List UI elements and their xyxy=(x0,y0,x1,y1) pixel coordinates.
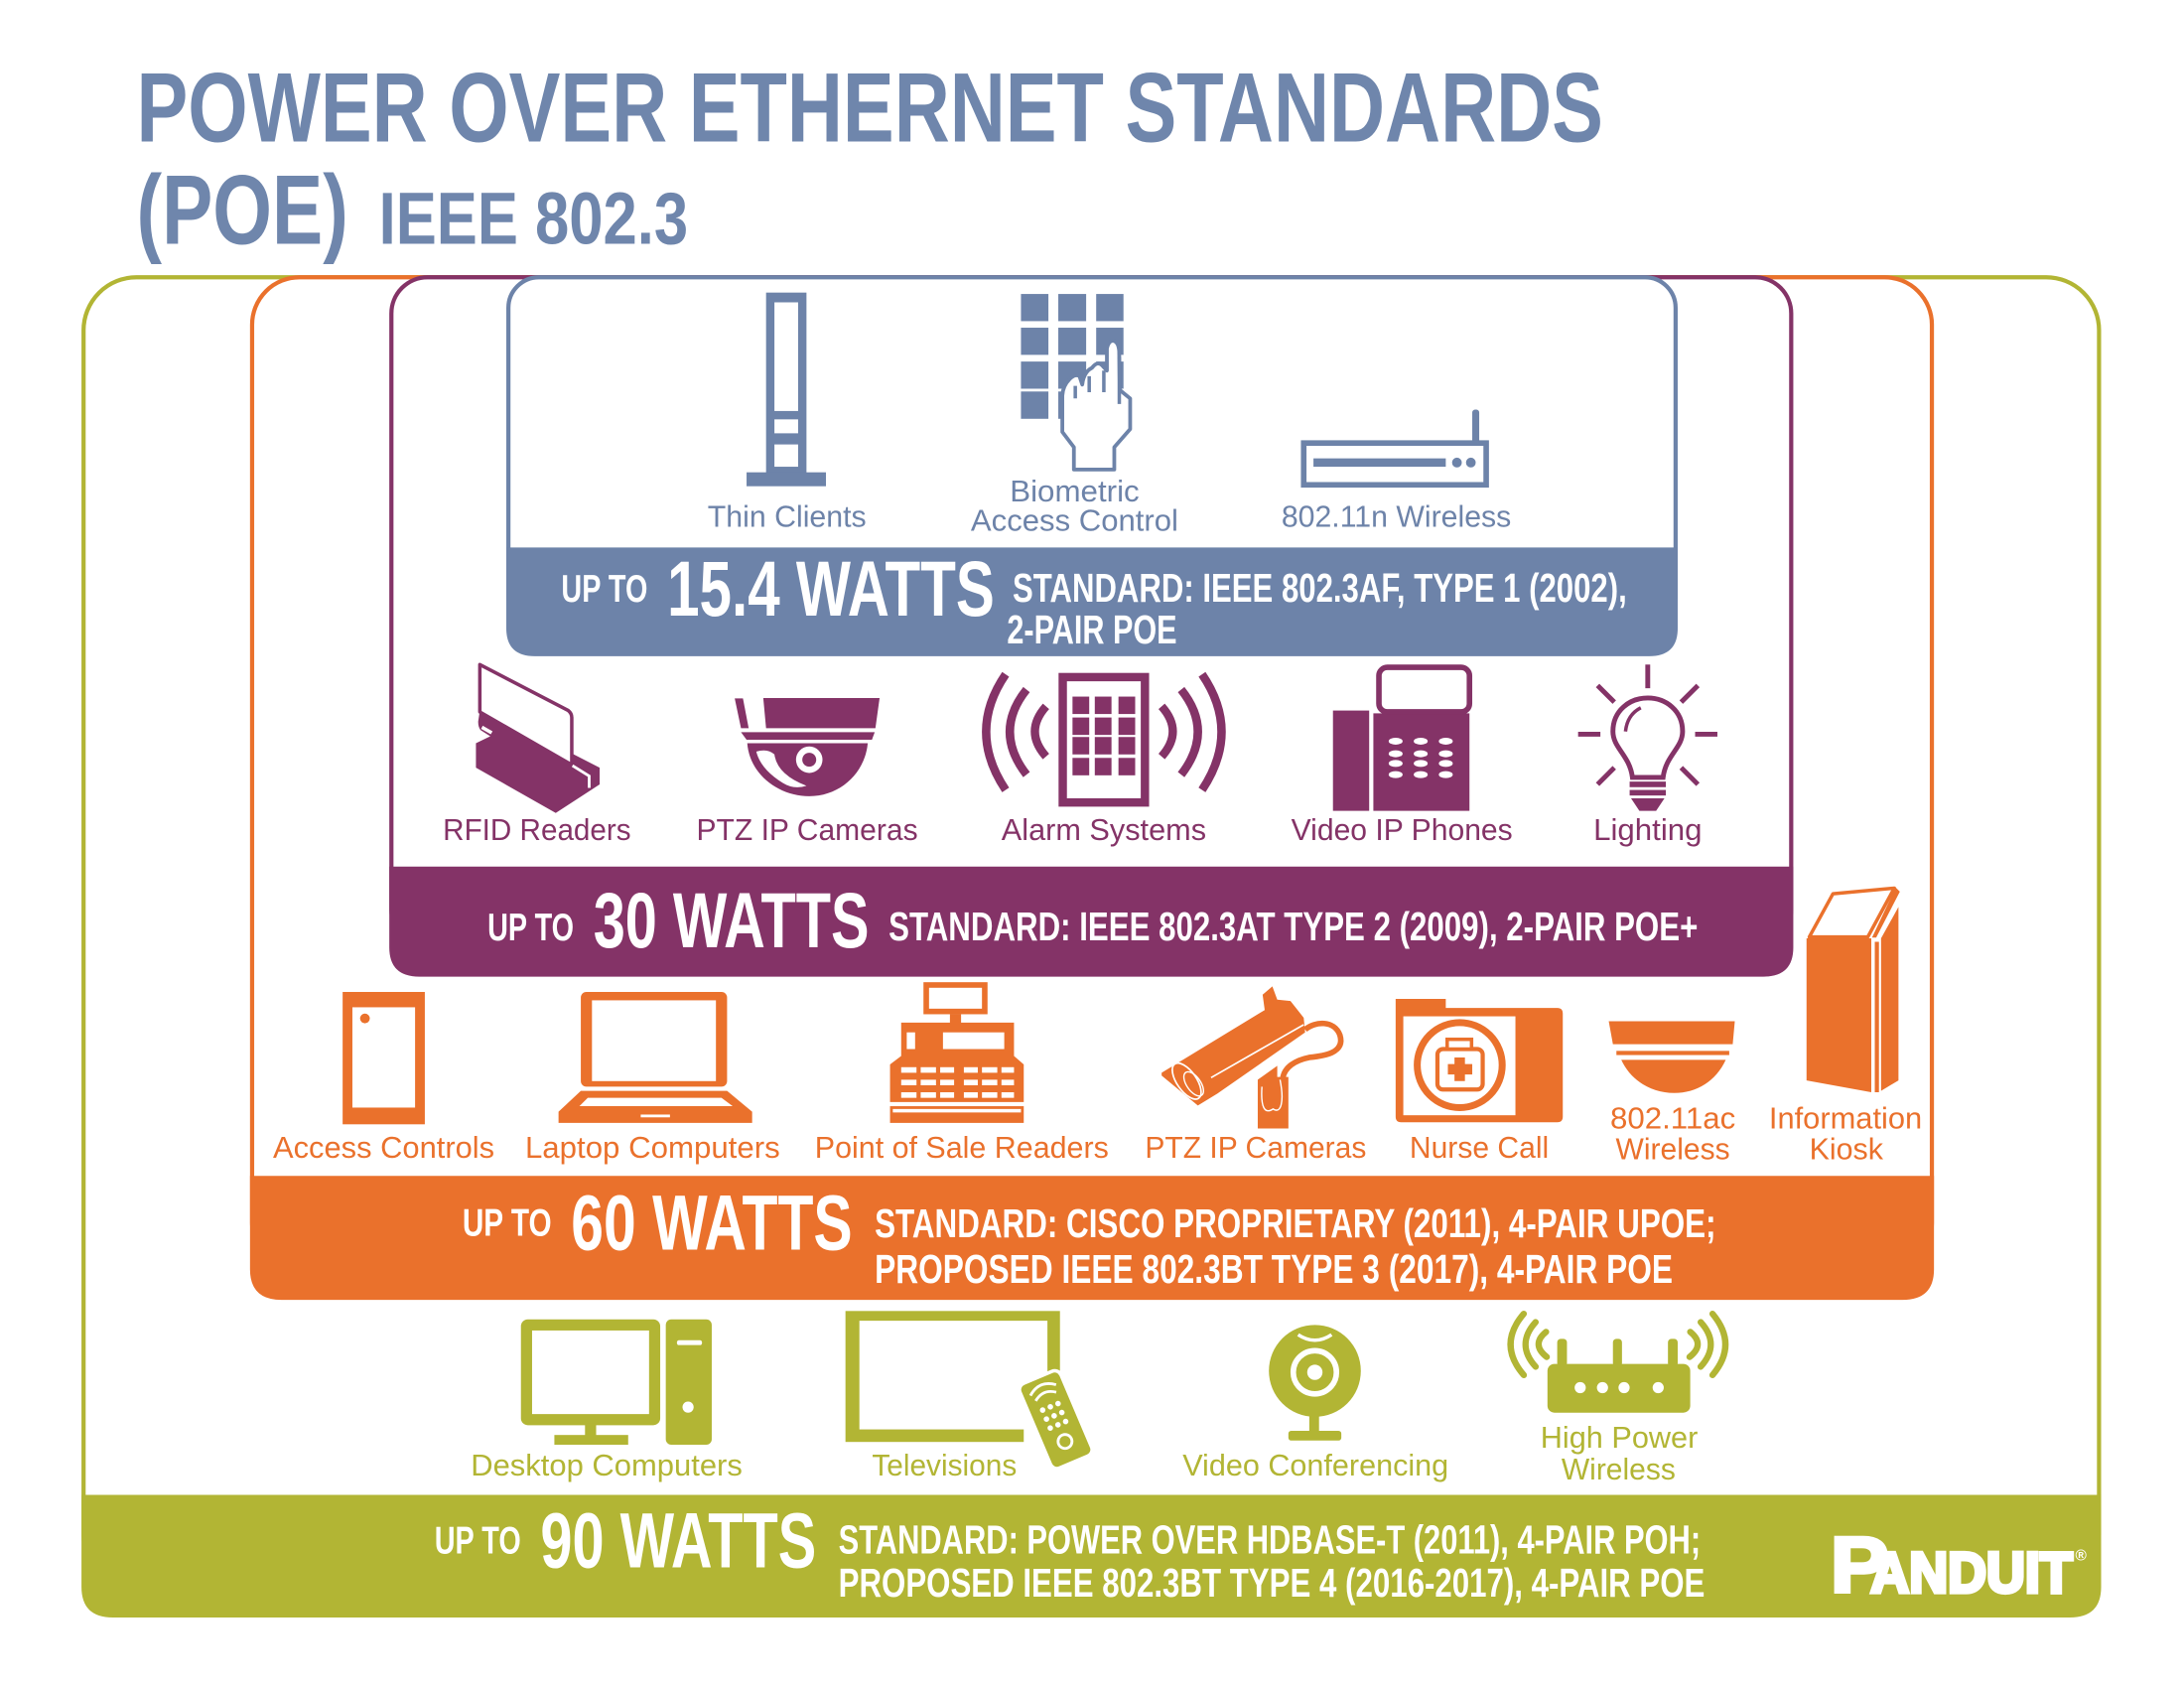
logo: Panduit: ® xyxy=(2076,1547,2088,1564)
icon: RFID reader xyxy=(476,664,600,813)
labels: 60 watt devices: Laptop Computers xyxy=(525,1130,780,1165)
labels: 90 watt devices: Wireless xyxy=(1562,1452,1676,1486)
band: 60 watts xyxy=(250,1176,1934,1300)
labels: 60 watt devices: PTZ IP Cameras xyxy=(1145,1130,1366,1165)
labels: 60 watt devices: 802.11ac xyxy=(1610,1101,1735,1136)
labels: 15.4 watt devices: Access Control xyxy=(971,503,1178,538)
labels: 90 watt devices: Televisions xyxy=(872,1448,1017,1482)
icon: point of sale reader xyxy=(890,982,1024,1123)
labels: 30 watt devices: RFID Readers xyxy=(443,812,631,847)
band: 60 watts: 60 WATTS xyxy=(571,1180,853,1267)
panel: up to 15.4 watts xyxy=(506,277,1678,656)
icon: 802.11ac wireless dome xyxy=(1609,1021,1735,1093)
labels: 60 watt devices xyxy=(273,1101,1922,1166)
panel: up to 30 watts xyxy=(389,277,1793,977)
title: (POE) xyxy=(137,156,348,266)
labels: 15.4 watt devices: Thin Clients xyxy=(708,498,867,533)
band: 90 watts: PROPOSED IEEE 802.3BT TYPE 4 (2016-2017), 4-PAIR POE xyxy=(839,1560,1705,1606)
band: 90 watts xyxy=(81,1495,2102,1618)
labels: 60 watt devices: Nurse Call xyxy=(1410,1130,1549,1165)
labels: 30 watt devices: PTZ IP Cameras xyxy=(697,812,918,847)
labels: 60 watt devices: Access Controls xyxy=(273,1130,494,1165)
band: 60 watts: UP TO xyxy=(463,1201,552,1245)
panel: up to 90 watts xyxy=(81,277,2102,1618)
band: 90 watts: 90 WATTS xyxy=(540,1496,816,1584)
icon: video IP phone xyxy=(1333,667,1469,811)
labels: 30 watt devices: Video IP Phones xyxy=(1292,812,1513,847)
band: 30 watts xyxy=(389,867,1793,977)
icon: light bulb xyxy=(1578,664,1717,811)
band: 15.4 watts: UP TO xyxy=(561,567,647,611)
title: IEEE 802.3 xyxy=(379,178,688,260)
logo: Panduit: P xyxy=(1831,1521,1889,1610)
band: 15.4 watts: 2-PAIR POE xyxy=(1007,607,1177,652)
icon: information kiosk xyxy=(1807,888,1900,1092)
icon: PTZ IP camera orange xyxy=(1161,986,1341,1129)
icon: high power wireless router xyxy=(1511,1314,1725,1413)
band: 90 watts: UP TO xyxy=(435,1518,521,1562)
icon: nurse call folder xyxy=(1396,999,1563,1122)
band: 90 watts: STANDARD: POWER OVER HDBASE-T (2011), 4-PAIR POH; xyxy=(839,1516,1701,1562)
band: 30 watts: 30 WATTS xyxy=(594,877,870,964)
labels: 15.4 watt devices: 802.11n Wireless xyxy=(1282,498,1511,533)
title xyxy=(137,53,1603,266)
labels: 60 watt devices: Kiosk xyxy=(1810,1131,1883,1166)
icon: laptop xyxy=(559,992,752,1123)
icon: 802.11n wireless router xyxy=(1303,410,1486,485)
band: 60 watts: STANDARD: CISCO PROPRIETARY (2011), 4-PAIR UPOE; xyxy=(875,1200,1716,1246)
icon: alarm system panel xyxy=(986,673,1221,806)
labels: 30 watt devices xyxy=(443,812,1703,847)
icon: thin client tower xyxy=(747,293,826,487)
icon: desktop computer xyxy=(521,1320,712,1445)
icon: access controls xyxy=(342,992,425,1124)
labels: 90 watt devices: High Power xyxy=(1541,1420,1698,1455)
icon: television xyxy=(846,1311,1094,1471)
band: 30 watts: STANDARD: IEEE 802.3AT TYPE 2 (2009), 2-PAIR POE+ xyxy=(888,904,1698,949)
labels: 60 watt devices: Wireless xyxy=(1616,1131,1730,1166)
labels: 30 watt devices: Alarm Systems xyxy=(1002,812,1206,847)
band: 60 watts: PROPOSED IEEE 802.3BT TYPE 3 (2017), 4-PAIR POE xyxy=(875,1246,1673,1292)
panel: up to 60 watts xyxy=(250,277,1934,1300)
logo: Panduit xyxy=(1831,1521,2088,1610)
icon: PTZ IP camera purple dome xyxy=(735,698,880,796)
title: POWER OVER ETHERNET STANDARDS xyxy=(137,53,1603,163)
band: 15.4 watts xyxy=(506,545,1678,656)
labels: 15.4 watt devices: Biometric xyxy=(1010,474,1140,508)
band: 15.4 watts: 15.4 WATTS xyxy=(667,545,995,633)
icon: biometric keypad with hand xyxy=(1021,294,1130,470)
labels: 60 watt devices: Point of Sale Readers xyxy=(815,1130,1109,1165)
labels: 90 watt devices: Desktop Computers xyxy=(471,1448,743,1482)
band: 30 watts: UP TO xyxy=(487,906,574,949)
labels: 90 watt devices xyxy=(471,1420,1698,1486)
labels: 15.4 watt devices xyxy=(708,474,1511,538)
labels: 60 watt devices: Information xyxy=(1769,1101,1922,1136)
band: 15.4 watts: STANDARD: IEEE 802.3AF, TYPE 1 (2002), xyxy=(1013,565,1627,611)
labels: 90 watt devices: Video Conferencing xyxy=(1182,1448,1448,1482)
icon: video conferencing webcam xyxy=(1269,1325,1361,1441)
labels: 30 watt devices: Lighting xyxy=(1593,812,1703,847)
logo: Panduit: ANDUIT xyxy=(1870,1542,2073,1606)
